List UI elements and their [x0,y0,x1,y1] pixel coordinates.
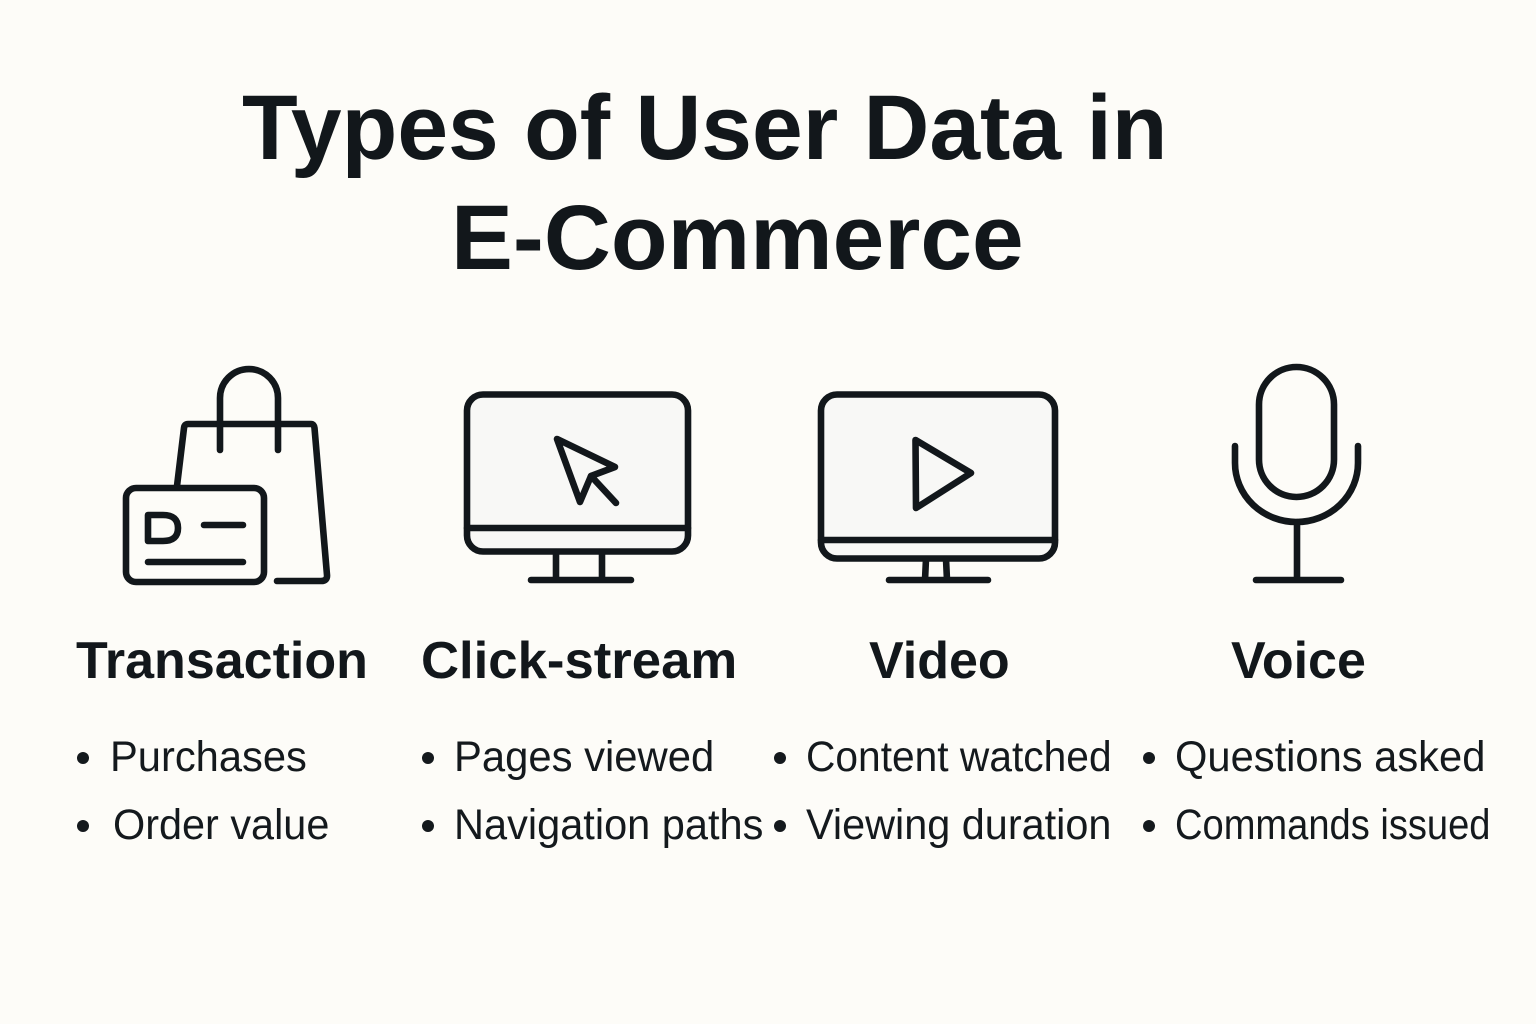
icon: monitor with play button [818,391,1058,584]
list: Voice items: Commands issued [1175,801,1490,849]
list: Transaction items: Purchases [110,733,307,781]
heading: Transaction: Transaction [76,632,368,690]
icon: microphone [1232,364,1362,584]
list: Voice items: Questions asked [1175,733,1485,781]
heading: Click-stream: Click-stream [421,632,737,690]
list: Transaction items [77,733,329,849]
title: Types of User Data in [242,77,1167,179]
list: Transaction items: Order value [113,801,329,849]
icon: shopping bag and card [122,366,330,586]
icon: monitor with cursor [464,391,692,584]
heading: Voice: Voice [1231,632,1366,690]
title [242,77,1167,289]
title: E-Commerce [451,187,1024,289]
heading: Video: Video [869,632,1010,690]
list: Video items: Content watched [806,733,1112,781]
list: Click-stream items [422,733,763,849]
list: Voice items [1143,733,1490,849]
list: Click-stream items: Navigation paths [454,801,763,849]
list: Click-stream items: Pages viewed [454,733,714,781]
list: Video items: Viewing duration [806,801,1111,849]
list: Video items [774,733,1112,849]
